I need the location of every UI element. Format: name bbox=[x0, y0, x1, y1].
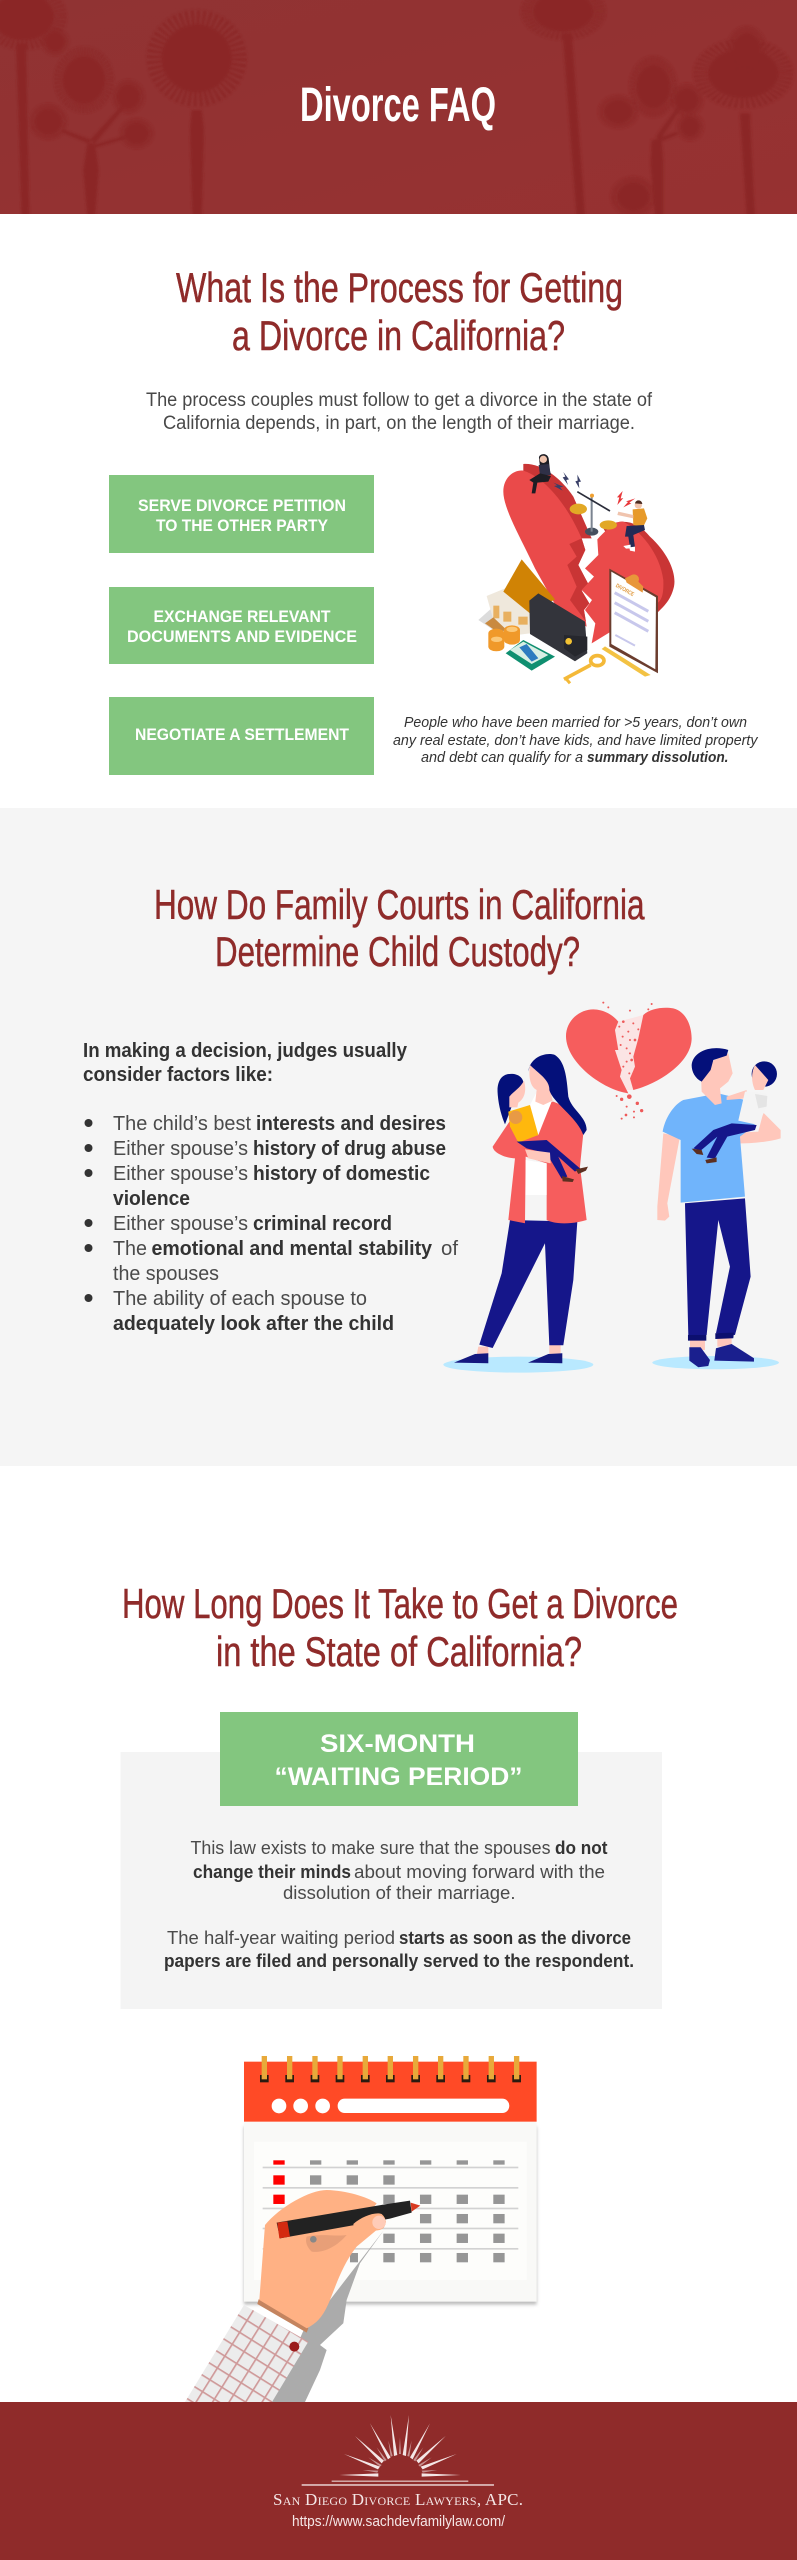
house bbox=[478, 607, 513, 640]
daughter in mother's arms bbox=[498, 1074, 588, 1182]
factor list: of bbox=[441, 1238, 458, 1260]
seated man bbox=[617, 500, 647, 552]
son in father's arms bbox=[692, 1061, 777, 1163]
section 3: timeline bbox=[120, 1580, 678, 2402]
intro paragraph: California depends, in part, on the length of their marriage. bbox=[163, 413, 635, 434]
callout: six-month waiting period: SIX-MONTH bbox=[320, 1730, 475, 1758]
broken heart bbox=[566, 1002, 692, 1120]
heart back side bbox=[523, 464, 592, 538]
callout: six-month waiting period: “WAITING PERIOD” bbox=[274, 1763, 522, 1791]
hand shadow bbox=[272, 2230, 384, 2402]
footer bbox=[0, 2402, 797, 2560]
factor list bbox=[84, 1113, 458, 1335]
step box: negotiate settlement: NEGOTIATE A SETTLEMENT bbox=[135, 725, 350, 744]
factor list: criminal record bbox=[253, 1213, 392, 1235]
factor list: Either spouse’s bbox=[113, 1213, 248, 1235]
seated woman bbox=[529, 454, 551, 493]
heading: process: What Is the Process for Getting bbox=[176, 264, 623, 311]
factor list: The child’s best bbox=[113, 1113, 251, 1135]
note: summary dissolution: and debt can qualify for a bbox=[421, 749, 583, 766]
intro paragraph: The process couples must follow to get a divorce in the state of bbox=[146, 390, 653, 411]
explanation text: dissolution of their marriage. bbox=[283, 1882, 516, 1903]
key bbox=[564, 656, 604, 683]
website url: https://www.sachdevfamilylaw.com/ bbox=[292, 2513, 506, 2530]
father bbox=[652, 1048, 781, 1369]
factor list: Either spouse’s bbox=[113, 1138, 248, 1160]
cash bbox=[506, 640, 555, 671]
explanation text: do not bbox=[555, 1837, 608, 1858]
heading: duration: in the State of California? bbox=[216, 1628, 582, 1675]
heading: process bbox=[176, 264, 623, 359]
step box: negotiate settlement bbox=[109, 697, 374, 775]
illustration: separated parents with children bbox=[443, 1002, 781, 1373]
scales of justice bbox=[570, 492, 617, 536]
cuff button bbox=[289, 2342, 299, 2352]
factor list: history of domestic bbox=[253, 1163, 430, 1185]
palm tree silhouettes bbox=[0, 0, 785, 217]
firm name: San Diego Divorce Lawyers, APC. bbox=[273, 2490, 523, 2509]
lead-in text bbox=[83, 1040, 408, 1086]
explanation text: about moving forward with the bbox=[354, 1861, 605, 1882]
step box: exchange documents bbox=[109, 587, 374, 664]
waiting period panel bbox=[120, 1712, 662, 2009]
wallet bbox=[529, 593, 587, 661]
illustration: calendar and hand with marker bbox=[185, 2056, 537, 2402]
note: summary dissolution: People who have been married for >5 years, don’t own bbox=[404, 714, 747, 731]
factor list: history of drug abuse bbox=[253, 1138, 446, 1160]
step box: serve petition: SERVE DIVORCE PETITION bbox=[138, 496, 346, 515]
section 1: process bbox=[109, 264, 759, 775]
thumb bbox=[353, 2213, 386, 2243]
factor list: violence bbox=[113, 1188, 190, 1210]
title: Divorce FAQ bbox=[300, 79, 496, 132]
factor list: the spouses bbox=[113, 1263, 219, 1285]
intro paragraph bbox=[146, 390, 653, 434]
step box: serve petition: TO THE OTHER PARTY bbox=[156, 516, 329, 535]
lightning bolts bbox=[553, 472, 581, 491]
heading: custody: Determine Child Custody? bbox=[215, 928, 580, 975]
factor list: The bbox=[113, 1238, 147, 1260]
pencil bbox=[602, 646, 651, 677]
shirt sleeve bbox=[185, 2305, 308, 2402]
clipboard bbox=[609, 569, 658, 673]
header banner bbox=[0, 0, 797, 217]
explanation text bbox=[164, 1837, 634, 1971]
callout: six-month waiting period bbox=[220, 1712, 578, 1806]
step box: serve petition bbox=[109, 475, 374, 553]
heading: custody bbox=[154, 881, 645, 975]
note: summary dissolution: summary dissolution. bbox=[587, 749, 728, 766]
mother bbox=[443, 1054, 593, 1373]
lead-in text: consider factors like: bbox=[83, 1064, 273, 1086]
lead-in text: In making a decision, judges usually bbox=[83, 1040, 408, 1062]
illustration: broken heart with assets bbox=[478, 454, 674, 683]
factor list: Either spouse’s bbox=[113, 1163, 248, 1185]
factor list: interests and desires bbox=[256, 1113, 446, 1135]
heading: process: a Divorce in California? bbox=[232, 312, 565, 359]
heading: duration bbox=[122, 1580, 678, 1675]
explanation text: The half-year waiting period bbox=[167, 1927, 395, 1948]
coins bbox=[488, 629, 504, 651]
explanation text: starts as soon as the divorce bbox=[399, 1927, 631, 1948]
marker bbox=[277, 2201, 420, 2238]
step box: exchange documents: DOCUMENTS AND EVIDENCE bbox=[127, 627, 357, 646]
section 2: child custody panel bbox=[0, 808, 797, 1466]
factor list: adequately look after the child bbox=[113, 1313, 394, 1335]
calendar page bbox=[244, 2062, 537, 2305]
factor list: emotional and mental stability bbox=[152, 1238, 433, 1260]
note: summary dissolution bbox=[393, 714, 759, 766]
factor list: The ability of each spouse to bbox=[113, 1288, 367, 1310]
illustration: broken heart with assets: DIVORCE bbox=[614, 583, 635, 598]
spiral rings bbox=[260, 2056, 521, 2082]
heart left half bbox=[503, 471, 589, 627]
step box: exchange documents: EXCHANGE RELEVANT bbox=[154, 607, 331, 626]
date grid bbox=[263, 2160, 518, 2262]
hand bbox=[257, 2190, 386, 2333]
logo: sunrise bbox=[302, 2415, 494, 2486]
explanation text: papers are filed and personally served to the respondent. bbox=[164, 1950, 634, 1971]
explanation text: change their minds bbox=[193, 1861, 351, 1882]
explanation text: This law exists to make sure that the spouses bbox=[190, 1837, 550, 1858]
heart right half bbox=[582, 522, 663, 643]
heading: custody: How Do Family Courts in California bbox=[154, 881, 645, 928]
note: summary dissolution: any real estate, don’t have kids, and have limited property bbox=[393, 732, 759, 749]
